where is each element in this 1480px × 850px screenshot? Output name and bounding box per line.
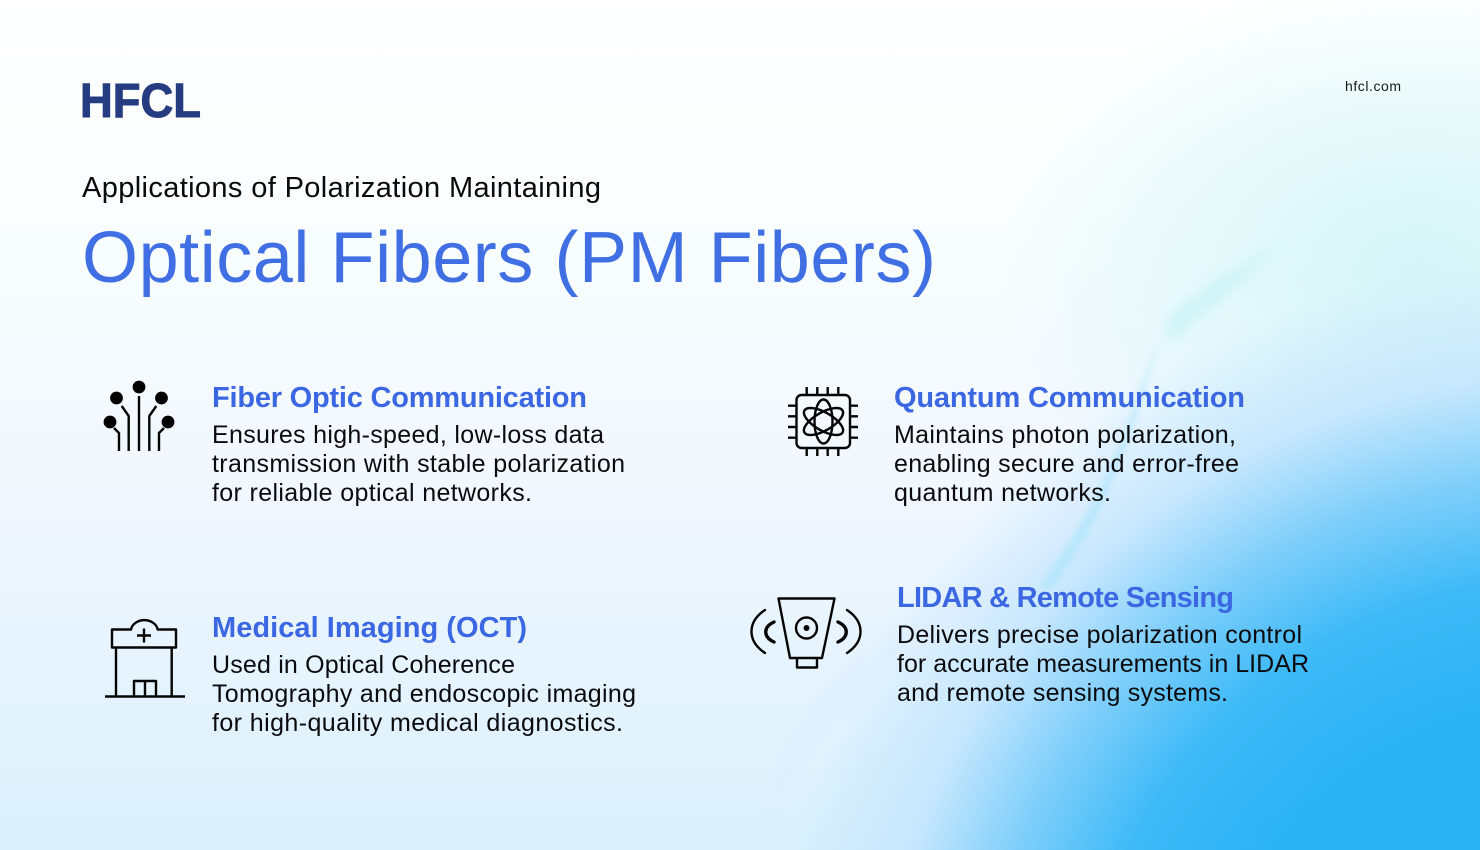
background streaks [762, 245, 1282, 845]
icon: quantum chip [788, 387, 858, 456]
description: lidar and remote sensing [897, 621, 1309, 707]
subtitle: Applications of Polarization Maintaining [82, 172, 601, 204]
description: quantum communication: quantum networks. [894, 479, 1111, 507]
website link: hfcl.com [1345, 78, 1401, 94]
description: quantum communication: Maintains photon polarization, [894, 421, 1236, 449]
description: fiber optic communication: for reliable optical networks. [212, 479, 532, 507]
panel: fiber optic communication [104, 381, 625, 507]
description: lidar and remote sensing: for accurate measurements in LIDAR [897, 650, 1309, 678]
description: fiber optic communication [212, 421, 625, 507]
icon: lidar sensor [752, 598, 860, 668]
description: medical imaging: Used in Optical Coherence [212, 651, 515, 679]
description: fiber optic communication: Ensures high-speed, low-loss data [212, 421, 604, 449]
description: medical imaging [212, 651, 636, 737]
description: quantum communication [894, 421, 1239, 507]
panel: medical imaging [105, 612, 636, 737]
description: lidar and remote sensing: and remote sensing systems. [897, 679, 1228, 707]
panel: lidar and remote sensing [752, 582, 1309, 707]
logo: HFCL: HFCL [80, 75, 201, 128]
title: Optical Fibers (PM Fibers) [82, 218, 936, 298]
heading: fiber optic communication: Fiber Optic Communication [212, 382, 587, 414]
icon: fiber optic strands [104, 381, 174, 451]
description: quantum communication: enabling secure and error-free [894, 450, 1239, 478]
panel: quantum communication [788, 382, 1245, 507]
icon: hospital building [105, 620, 185, 696]
description: fiber optic communication: transmission with stable polarization [212, 450, 625, 478]
heading: medical imaging: Medical Imaging (OCT) [212, 612, 527, 644]
heading: quantum communication: Quantum Communication [894, 382, 1245, 414]
description: medical imaging: for high-quality medical diagnostics. [212, 709, 623, 737]
heading: lidar and remote sensing: LIDAR & Remote Sensing [897, 582, 1234, 614]
description: lidar and remote sensing: Delivers precise polarization control [897, 621, 1302, 649]
description: medical imaging: Tomography and endoscopic imaging [212, 680, 636, 708]
